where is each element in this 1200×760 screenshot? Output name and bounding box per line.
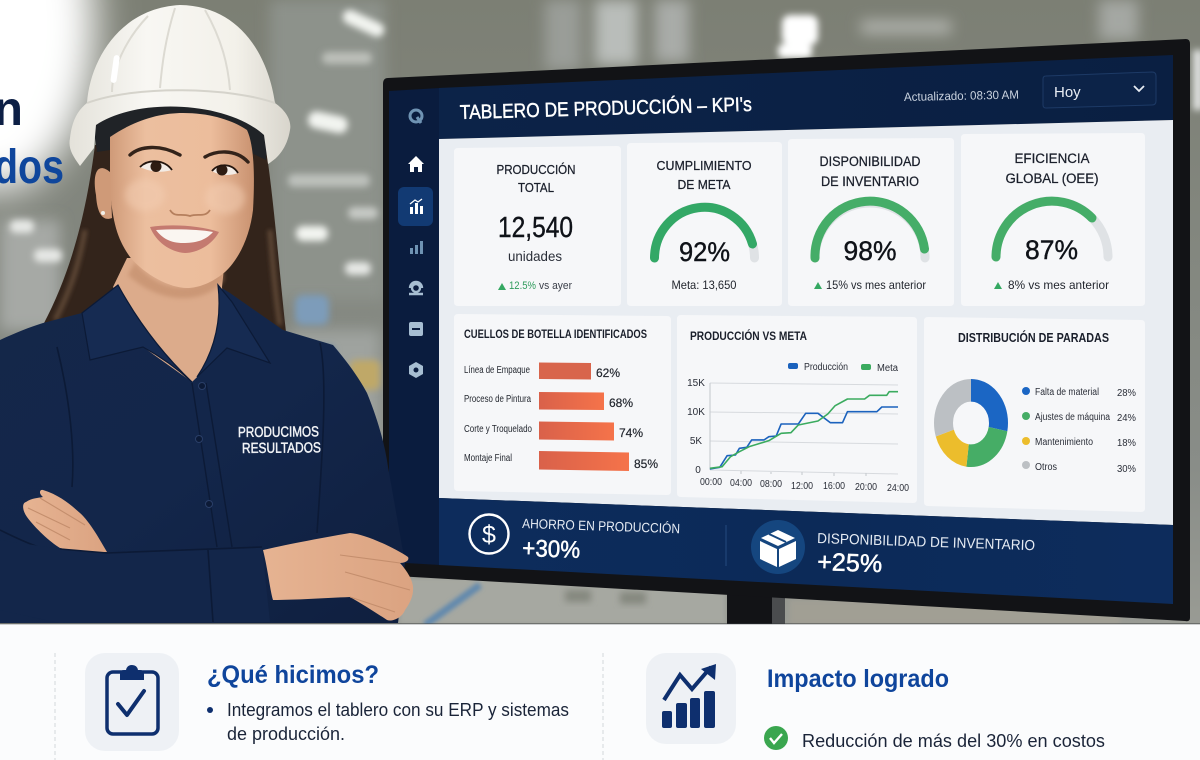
header text [459, 72, 1156, 124]
cheek highlights [125, 179, 245, 214]
shirt logo [238, 424, 321, 457]
KPI card: disponibilidad de inventario [788, 138, 954, 306]
panel: producción vs meta: PRODUCCIÓN VS META [690, 328, 807, 343]
KPI card: cumplimiento de meta: Meta: 13,650 [672, 278, 737, 292]
sleeve seams [0, 343, 324, 552]
bullet text [207, 700, 569, 744]
hair highlights [55, 230, 280, 325]
left hand [23, 490, 107, 552]
KPI card: eficiencia global: EFICIENCIA [1014, 151, 1090, 166]
savings band: inventario: DISPONIBILIDAD DE INVENTARIO [817, 531, 1035, 554]
sidebar icons [398, 110, 433, 378]
savings band: inventario [751, 520, 1035, 578]
icon: calendar [409, 322, 423, 336]
ear [95, 168, 112, 219]
icon: growth chart [646, 653, 736, 744]
donut legend: 30% [1117, 464, 1136, 475]
screen content area [439, 120, 1173, 525]
KPI card: cumplimiento de meta: CUMPLIMIENTO [656, 158, 752, 173]
left hand finger lines [28, 498, 85, 540]
legend [788, 362, 898, 374]
heading: ¿Qué hicimos? [207, 661, 379, 689]
icon: dollar [470, 514, 508, 554]
helmet band [93, 104, 268, 160]
savings band: ahorro [470, 514, 680, 564]
donut legend: Ajustes de máquina [1035, 412, 1110, 423]
KPI card: eficiencia global [961, 133, 1145, 306]
gauge 98% [815, 201, 925, 258]
monitor bezel [383, 39, 1190, 621]
icon: Q logo [410, 110, 422, 123]
KPI card: producción total: PRODUCCIÓN [496, 162, 576, 177]
KPI card: producción total: vs ayer [539, 280, 572, 292]
hair [43, 145, 286, 335]
neck shadow [128, 262, 224, 298]
cuff lines [60, 547, 262, 622]
eyebrows [130, 147, 248, 162]
helmet ridges [112, 8, 230, 92]
eyes [140, 161, 238, 176]
bar chart: bottlenecks: Proceso de Pintura [464, 394, 531, 405]
sidebar active tile [398, 187, 433, 226]
panel: producción vs meta [677, 315, 917, 503]
icon: box [751, 520, 805, 574]
icon: clipboard check [85, 653, 179, 751]
forearm sleeve [0, 540, 270, 623]
icon: gear report [409, 282, 423, 294]
KPI card: producción total: 12.5% [509, 280, 536, 292]
bar chart: bottlenecks: 62% [596, 366, 620, 380]
bar chart: bottlenecks: Corte y Troquelado [464, 424, 532, 435]
donut legend: Mantenimiento [1035, 437, 1093, 448]
line chart: 16:00 [823, 481, 845, 492]
bar chart: bottlenecks: Montaje Final [464, 453, 512, 464]
KPI card: disponibilidad de inventario: 98% [844, 236, 896, 266]
donut legend: 28% [1117, 388, 1136, 399]
earring [101, 211, 105, 215]
screen header [439, 55, 1173, 139]
shirt buttons [196, 382, 238, 620]
hero title fragments [0, 83, 64, 194]
donut legend: 18% [1117, 438, 1136, 449]
gauge 87% [996, 201, 1108, 257]
dashboard title: TABLERO DE PRODUCCIÓN – KPI's [459, 93, 752, 124]
KPI card: cumplimiento de meta: DE META [678, 177, 731, 192]
nose [170, 210, 210, 216]
savings band: ahorro: +30% [522, 535, 581, 564]
panel: impacto logrado [646, 653, 1105, 751]
bar chart: bottlenecks: Línea de Empaque [464, 365, 530, 376]
line chart: 0 [695, 465, 701, 476]
line chart: 12:00 [791, 481, 813, 492]
legend: Meta [877, 363, 898, 374]
line chart: 5K [690, 436, 702, 447]
panel: distribución de paradas [924, 317, 1145, 512]
KPI card: producción total: TOTAL [518, 181, 554, 195]
bottom info section [0, 623, 1200, 760]
shirt logo: PRODUCIMOS [238, 424, 319, 441]
line chart: 00:00 [700, 477, 722, 488]
savings band: inventario: +25% [817, 548, 883, 578]
bar chart: bottlenecks [464, 362, 658, 471]
panel: qué hicimos [85, 653, 569, 751]
legend: Producción [804, 362, 848, 373]
line chart: 24:00 [887, 483, 909, 494]
woman in hard hat [0, 5, 413, 623]
shirt [0, 287, 405, 623]
line chart: 04:00 [730, 478, 752, 489]
bottom band background [439, 498, 1173, 604]
KPI card: eficiencia global: 8% vs mes anterior [1008, 278, 1109, 292]
icon: hexagon [409, 362, 423, 378]
icon: chart [410, 241, 423, 254]
KPI card: disponibilidad de inventario: 15% vs mes anterior [826, 278, 926, 292]
bullet text: Integramos el tablero con su ERP y sistemas [227, 700, 569, 720]
panel: cuellos de botella: CUELLOS DE BOTELLA IDENTIFICADOS [464, 329, 647, 341]
line chart: 15K [687, 378, 705, 389]
KPI card: disponibilidad de inventario: DISPONIBILIDAD [820, 154, 921, 169]
KPI card: producción total: 12,540 [498, 212, 573, 244]
bar chart: bottlenecks: 74% [619, 426, 643, 440]
screen sidebar [389, 88, 440, 565]
donut legend: Otros [1035, 462, 1057, 473]
shirt placket [192, 383, 232, 547]
savings band: ahorro: AHORRO EN PRODUCCIÓN [522, 516, 680, 536]
period dropdown: Hoy [1054, 84, 1081, 101]
donut legend [1022, 387, 1136, 475]
panel: cuellos de botella [454, 314, 671, 495]
line chart: 08:00 [760, 479, 782, 490]
mouth [150, 225, 219, 253]
monitor stand [727, 590, 785, 625]
collar [82, 285, 270, 382]
right hand finger lines [340, 555, 410, 612]
gauge 92% [654, 207, 754, 258]
KPI card: producción total [454, 146, 621, 306]
KPI card: cumplimiento de meta [627, 142, 782, 306]
face [110, 113, 254, 288]
heading: Impacto logrado [767, 665, 949, 693]
helmet highlight [110, 55, 120, 83]
bullet text: de producción. [227, 724, 345, 744]
bar chart: bottlenecks: 68% [609, 396, 633, 410]
KPI card: disponibilidad de inventario: DE INVENTARIO [821, 174, 919, 189]
donut legend: Falta de material [1035, 387, 1099, 398]
donut chart [944, 390, 998, 456]
neck [113, 258, 227, 382]
panel: distribución de paradas: DISTRIBUCIÓN DE PARADAS [958, 330, 1109, 345]
KPI card: cumplimiento de meta: 92% [679, 237, 730, 267]
helmet [69, 5, 290, 166]
line chart: 10K [687, 407, 705, 418]
KPI card: producción total: unidades [508, 248, 562, 264]
monitor [383, 39, 1190, 621]
impact text: Reducción de más del 30% en costos [802, 731, 1105, 751]
bar chart: bottlenecks: 85% [634, 457, 658, 471]
line chart [687, 378, 909, 494]
helmet rim line [87, 90, 275, 103]
KPI card: eficiencia global: 87% [1025, 235, 1078, 265]
KPI card: eficiencia global: GLOBAL (OEE) [1006, 171, 1098, 186]
donut legend: 24% [1117, 413, 1136, 424]
icon: home [408, 156, 424, 172]
period dropdown [1043, 72, 1156, 108]
updated timestamp: Actualizado: 08:30 AM [904, 88, 1019, 104]
shirt logo: RESULTADOS [242, 440, 321, 457]
icon: check [764, 726, 788, 750]
right hand [263, 533, 413, 621]
line chart: 20:00 [855, 482, 877, 493]
icon: dollar: $ [482, 521, 496, 549]
